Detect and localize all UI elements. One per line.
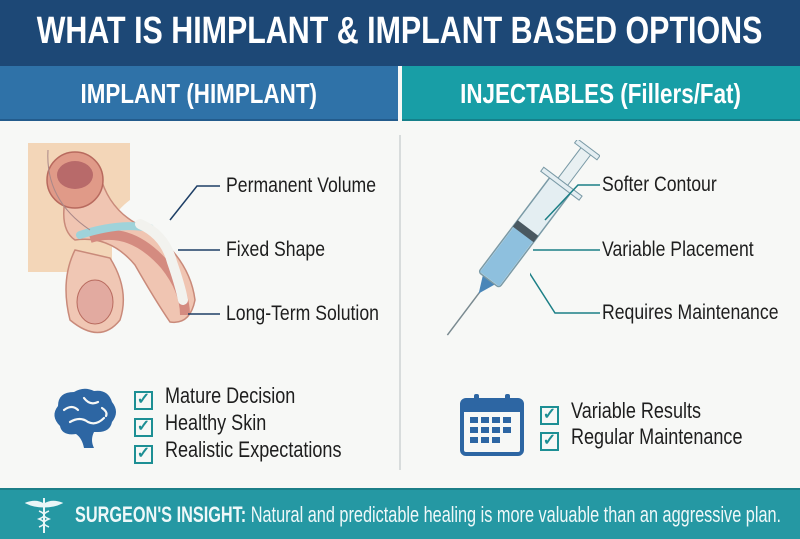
label: requires maintenance: Requires Maintenance [602,301,779,324]
label: softer contour: Softer Contour [602,173,717,196]
check item: Realistic Expectations [165,437,341,462]
label: long-term solution: Long-Term Solution [226,302,379,325]
check item: Mature Decision [165,383,295,408]
footer: surgeon's insight [0,488,800,539]
checklist: injectables [540,398,742,451]
footer text: SURGEON'S INSIGHT: Natural and predictable healing is more valuable than an aggressive plan. [75,502,781,527]
check item: Variable Results [571,398,701,423]
icon: brain [54,388,116,448]
subheader: implant [0,66,398,121]
check item: Healthy Skin [165,410,266,435]
leader lines: implant [170,185,220,315]
check item: ✓ [137,418,150,435]
icon: calendar [460,394,524,456]
label: variable placement: Variable Placement [602,238,754,261]
title: WHAT IS HIMPLANT & IMPLANT BASED OPTIONS [37,10,763,52]
check item: Regular Maintenance [571,424,742,449]
label: fixed shape: Fixed Shape [226,238,325,261]
leader lines: injectables [530,184,600,314]
icon: caduceus [24,498,64,533]
subheader: injectables: INJECTABLES (Fillers/Fat) [461,78,741,109]
illustration: anatomy with implant [28,143,196,334]
check item: ✓ [543,432,556,449]
subheader: implant: IMPLANT (HIMPLANT) [81,78,317,109]
subheader: injectables [402,66,800,121]
check item: ✓ [543,406,556,423]
checklist: implant [134,383,341,464]
illustration: syringe [446,140,600,336]
check item: ✓ [137,445,150,462]
check item: ✓ [137,391,150,408]
title bar [0,0,800,66]
label: permanent volume: Permanent Volume [226,174,376,197]
